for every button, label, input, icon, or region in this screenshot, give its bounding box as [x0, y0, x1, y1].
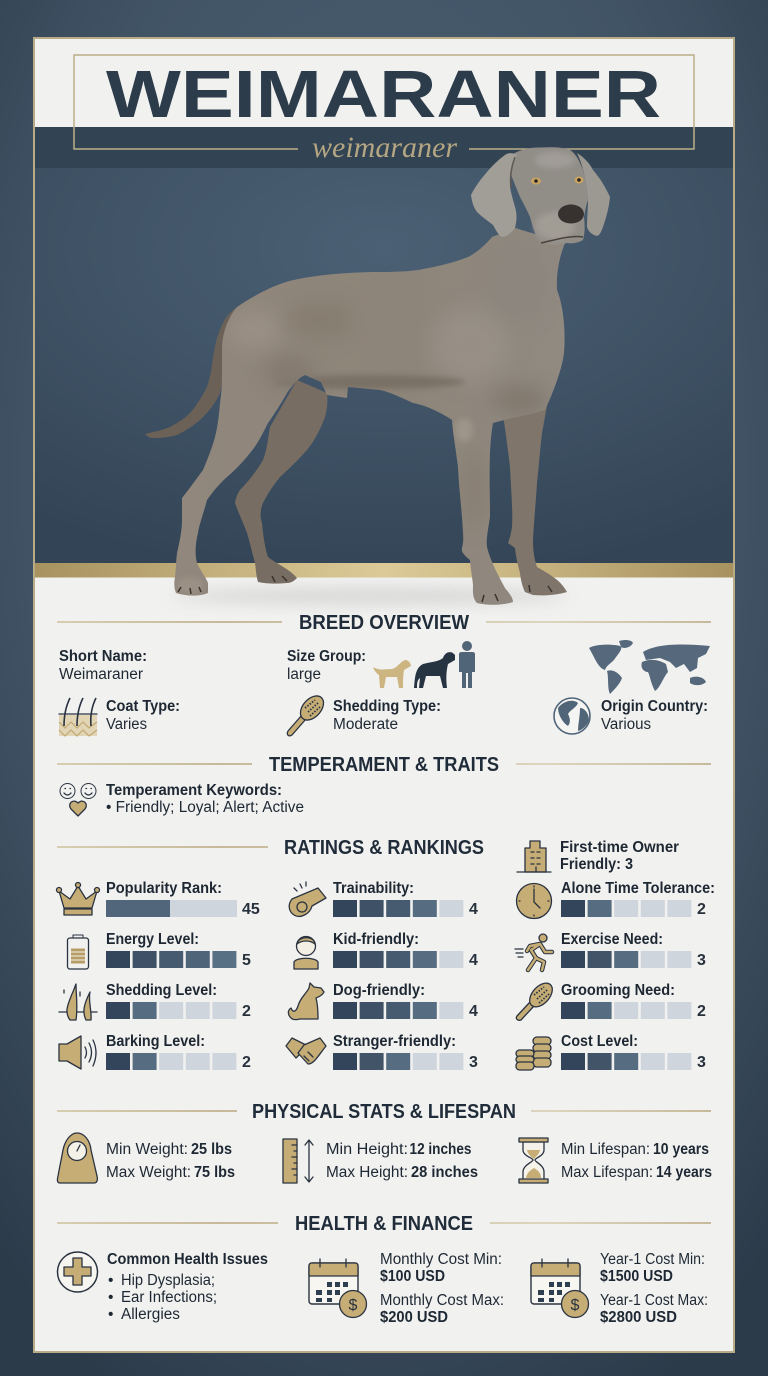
text: short name — [59, 648, 147, 683]
icon: coins — [516, 1037, 551, 1070]
heading: breed overview: BREED OVERVIEW — [299, 612, 469, 634]
text: size group — [287, 648, 366, 683]
row: trainability: 4 — [469, 901, 478, 918]
icon: medical cross — [58, 1252, 98, 1292]
text: coat type: Coat Type: — [106, 698, 180, 715]
text: common health issues: Allergies — [121, 1306, 180, 1323]
text: first-time owner — [560, 839, 679, 873]
text: year-1 cost: $2800 USD — [600, 1309, 677, 1326]
row: barking level: Barking Level: — [106, 1033, 205, 1050]
row: shedding level: 2 — [242, 1003, 251, 1020]
text: height: Min Height: — [326, 1141, 408, 1158]
icon: size comparison — [373, 641, 475, 688]
text: short name: Weimaraner — [59, 666, 143, 683]
icon: globe — [554, 698, 590, 734]
text: size group: Size Group: — [287, 648, 366, 665]
row: stranger-friendly: Stranger-friendly: — [333, 1033, 456, 1050]
icon: clock — [516, 884, 552, 918]
row: exercise need: Exercise Need: — [561, 931, 663, 948]
text: lifespan: 14 years — [656, 1164, 712, 1181]
text: temperament keywords — [106, 782, 304, 816]
icon: battery — [68, 935, 88, 969]
heading: health: HEALTH & FINANCE — [295, 1213, 473, 1235]
text: temperament keywords: Temperament Keywords: — [106, 782, 282, 799]
row: stranger-friendly: 3 — [469, 1054, 478, 1071]
text: origin country: Origin Country: — [601, 698, 708, 715]
icon: handshake — [286, 1038, 326, 1064]
icon: speaker — [59, 1036, 96, 1069]
text: shedding type — [333, 698, 441, 733]
text: monthly cost: $200 USD — [380, 1309, 448, 1326]
icon: weight scale — [57, 1133, 97, 1183]
panel: health and finance — [57, 1213, 711, 1326]
icon: calendar with coin 2 — [531, 1259, 588, 1318]
row: kid-friendly — [294, 931, 478, 969]
panel: temperament and traits — [57, 754, 711, 816]
row: alone time: Alone Time Tolerance: — [561, 880, 715, 897]
text: weight — [106, 1141, 235, 1181]
subtitle: weimaraner — [312, 131, 457, 164]
row: trainability: Trainability: — [333, 880, 414, 897]
text: weight: 75 lbs — [194, 1164, 235, 1181]
text: temperament keywords: • Friendly; Loyal; Alert; Active — [106, 799, 304, 816]
row: dog-friendly: Dog-friendly: — [333, 982, 425, 999]
text: common health issues: • — [108, 1272, 113, 1289]
dog illustration — [145, 147, 610, 605]
row: exercise need — [515, 931, 706, 970]
row: cost level — [516, 1033, 706, 1071]
title banner — [74, 55, 694, 149]
icon: runner — [515, 934, 552, 970]
text: shedding type: Shedding Type: — [333, 698, 441, 715]
row: cost level: 3 — [697, 1054, 706, 1071]
text: common health issues: Common Health Issues — [107, 1251, 268, 1268]
text: year-1 cost: $1500 USD — [600, 1268, 673, 1285]
text: common health issues — [107, 1251, 268, 1323]
text: lifespan: Min Lifespan: — [561, 1141, 650, 1158]
row: popularity rank — [56, 880, 260, 918]
title frame — [74, 55, 694, 149]
icon: hair shedding — [59, 984, 97, 1020]
row: cost level: Cost Level: — [561, 1033, 638, 1050]
icon: hourglass — [519, 1138, 548, 1183]
text: year-1 cost — [600, 1251, 708, 1326]
text: first-time owner: Friendly: 3 — [560, 856, 633, 873]
row: popularity rank: Popularity Rank: — [106, 880, 222, 897]
text: origin country — [601, 698, 708, 733]
row: shedding level: Shedding Level: — [106, 982, 217, 999]
row: barking level — [59, 1033, 251, 1071]
row: alone time — [516, 880, 715, 918]
icon: crown — [56, 882, 100, 915]
text: height: 12 inches — [410, 1141, 472, 1158]
row: alone time: 2 — [697, 901, 706, 918]
icon: faces and heart — [60, 784, 96, 816]
icon: child — [294, 936, 318, 969]
text: year-1 cost: Year-1 Cost Min: — [600, 1251, 705, 1268]
row: grooming need: Grooming Need: — [561, 982, 675, 999]
row: kid-friendly: Kid-friendly: — [333, 931, 419, 948]
row: energy level: Energy Level: — [106, 931, 199, 948]
row: grooming need — [516, 979, 706, 1020]
row: barking level: 2 — [242, 1054, 251, 1071]
text: weight: Min Weight: — [106, 1141, 188, 1158]
text: common health issues: • — [108, 1289, 113, 1306]
icon: calendar with coin 2: $ — [571, 1297, 580, 1314]
icon: brush — [287, 692, 328, 736]
text: shedding type: Moderate — [333, 716, 398, 733]
icon: ruler and arrow — [283, 1139, 313, 1183]
panel: breed overview — [57, 612, 711, 736]
text: height — [326, 1141, 478, 1181]
text: coat type: Varies — [106, 716, 147, 733]
panel: ratings and rankings — [56, 837, 715, 1071]
text: height: Max Height: — [326, 1164, 408, 1181]
row: exercise need: 3 — [697, 952, 706, 969]
icon: calendar with coin: $ — [349, 1297, 358, 1314]
text: weight: Max Weight: — [106, 1164, 191, 1181]
text: lifespan — [561, 1141, 712, 1181]
row: stranger-friendly — [286, 1033, 478, 1071]
ground shadow — [170, 589, 570, 603]
text: monthly cost: Monthly Cost Max: — [380, 1292, 504, 1309]
row: dog-friendly: 4 — [469, 1003, 478, 1020]
text: common health issues: Ear Infections; — [121, 1289, 217, 1306]
icon: grooming brush — [516, 979, 557, 1020]
text: size group: large — [287, 666, 321, 683]
gold divider bar — [35, 563, 733, 578]
text: monthly cost — [380, 1251, 504, 1326]
row: popularity rank: 45 — [242, 901, 260, 918]
text: monthly cost: $100 USD — [380, 1268, 445, 1285]
text: common health issues: • — [108, 1306, 113, 1323]
row: kid-friendly: 4 — [469, 952, 478, 969]
text: weight: 25 lbs — [191, 1141, 232, 1158]
text: year-1 cost: Year-1 Cost Max: — [600, 1292, 708, 1309]
icon: world map — [589, 640, 710, 694]
icon: sitting dog — [288, 983, 324, 1020]
icon: calendar with coin — [309, 1259, 366, 1318]
text: first-time owner: First-time Owner — [560, 839, 679, 856]
panel: physical stats and lifespan — [57, 1101, 712, 1183]
icon: building — [517, 841, 551, 872]
row: shedding level — [59, 982, 251, 1020]
text: lifespan: 10 years — [653, 1141, 709, 1158]
text: short name: Short Name: — [59, 648, 147, 665]
text: lifespan: Max Lifespan: — [561, 1164, 653, 1181]
text: height: 28 inches — [411, 1164, 478, 1181]
title: WEIMARANER — [106, 57, 661, 132]
row: energy level: 5 — [242, 952, 251, 969]
text: origin country: Various — [601, 716, 651, 733]
icon: coat — [59, 698, 97, 736]
heading: temperament: TEMPERAMENT & TRAITS — [269, 754, 499, 776]
icon: whistle — [289, 882, 326, 916]
row: trainability — [289, 880, 478, 918]
heading: physical: PHYSICAL STATS & LIFESPAN — [252, 1101, 516, 1123]
text: common health issues: Hip Dysplasia; — [121, 1272, 215, 1289]
text: coat type — [106, 698, 180, 733]
row: energy level — [68, 931, 251, 969]
row: grooming need: 2 — [697, 1003, 706, 1020]
heading: ratings: RATINGS & RANKINGS — [284, 837, 484, 859]
row: dog-friendly — [288, 982, 478, 1020]
text: monthly cost: Monthly Cost Min: — [380, 1251, 502, 1268]
